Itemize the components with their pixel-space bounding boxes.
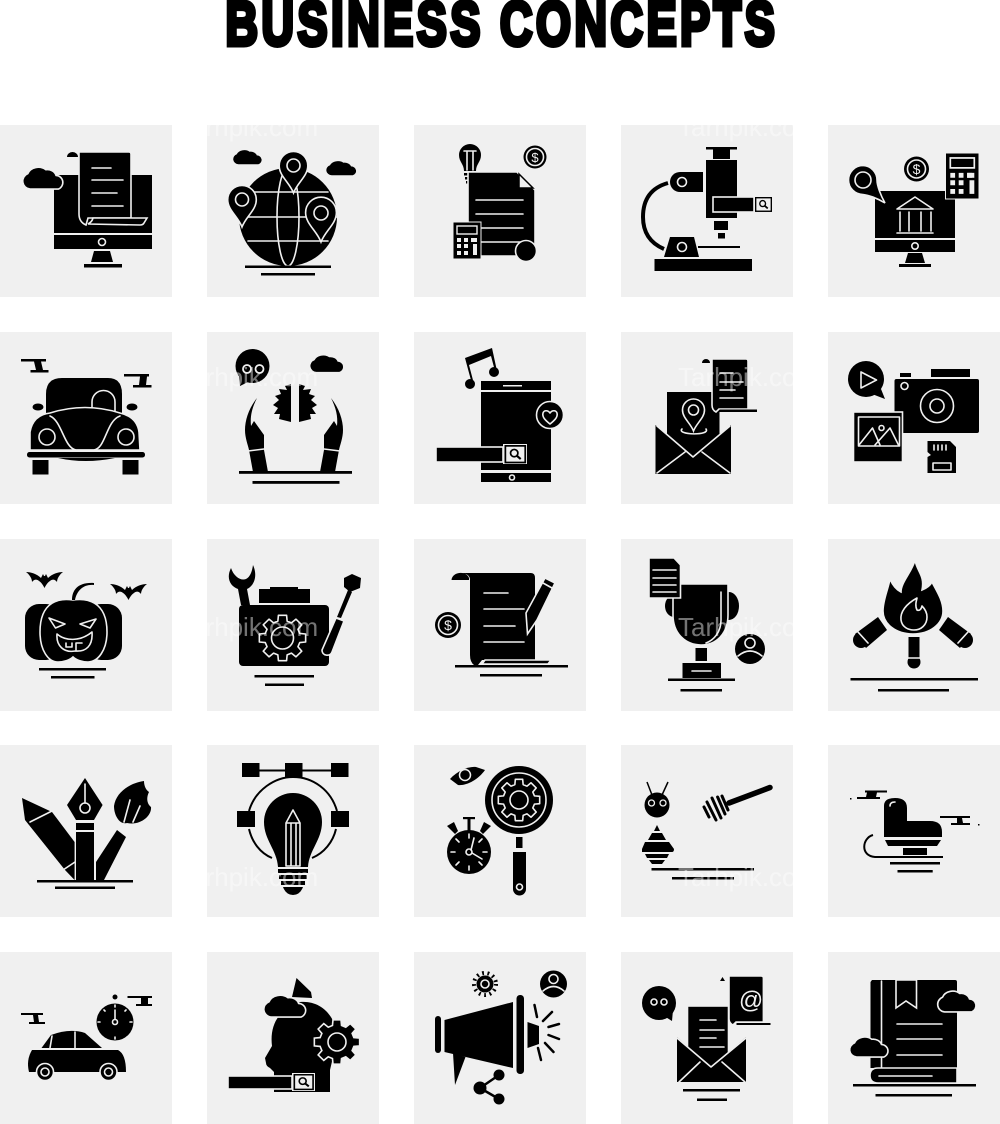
panel: bee and honey [621,745,793,917]
icon: scroll pen coin [435,573,568,676]
panel: brain in hands [207,332,379,504]
panel: sled [828,745,1000,917]
panel: bank on monitor [828,125,1000,297]
icon: wind marks [850,790,980,826]
panel: trophy [621,539,793,711]
panel: front view car [0,332,172,504]
panel: microscope [621,125,793,297]
icon: head cloud gear search [228,978,360,1092]
icon: envelope letter pin scroll [656,359,757,474]
watermarks: Tarhpik.com [678,612,818,642]
icon: flame and logs [850,560,978,692]
watermarks: Tarhpik.com [678,862,818,892]
icon: scroll pen coin: $ [444,617,452,633]
icon: speech bubble envelope scroll: @ [739,987,763,1014]
panel: scroll with pen [414,539,586,711]
icon: book clouds [850,980,976,1096]
icon: camera photo sd card play [848,361,979,473]
panel: car with timer [0,952,172,1124]
icon: wind marks [21,359,152,388]
icon: megaphone gear user share [435,970,567,1104]
panel: envelope with location [621,332,793,504]
panel: document with bulb [414,125,586,297]
icon: trophy document user [649,558,765,692]
panel: toolbox [207,539,379,711]
panel: globe with pins [207,125,379,297]
icon: monitor bank pin coin calculator: $ [913,161,921,177]
panel: art tools [0,745,172,917]
icon: bulb with vector handles [237,763,349,895]
panel: campfire [828,539,1000,711]
icon: monitor document cloud [23,152,152,268]
icon: car side and clock [21,994,152,1080]
watermarks: Tarhpik.com [178,612,318,642]
icon: beetle car [27,378,145,474]
icon: document bulb calculator coin: $ [531,150,539,165]
panel: pumpkin [0,539,172,711]
icon: document bulb calculator coin [453,144,546,262]
icon: globe pins clouds [228,150,356,276]
icon: briefcase gear wrench screwdriver [229,565,361,666]
panel: bulb vector [207,745,379,917]
panel: head with gear [207,952,379,1124]
ground lines [254,675,314,686]
watermarks: Tarhpik.com [178,862,318,892]
watermarks: Tarhpik.com [678,112,818,142]
watermarks: Tarhpik.com [178,362,318,392]
panel: megaphone [414,952,586,1124]
icon: bee hive dipper [642,782,770,880]
panel: book [828,952,1000,1124]
watermarks: Tarhpik.com [678,362,818,392]
panel: open mail [621,952,793,1124]
icon: eye magnifier stopwatch [447,766,553,896]
icon: pencil pen brush [22,778,151,889]
panel: monitor with document [0,125,172,297]
icon: speech bubble envelope scroll [642,976,770,1101]
icon: sled [864,798,943,872]
icon: phone music heart search [436,348,564,482]
watermarks: Tarhpik.com [178,112,318,142]
icon: monitor bank pin coin calculator [848,153,979,267]
panel: gear search with stopwatch [414,745,586,917]
watermarks [178,112,818,892]
panel: camera [828,332,1000,504]
icon: microscope [643,147,772,271]
icon: hands holding brain [236,349,352,484]
panel: phone with music [414,332,586,504]
icon: jack-o-lantern and bats [25,572,147,678]
